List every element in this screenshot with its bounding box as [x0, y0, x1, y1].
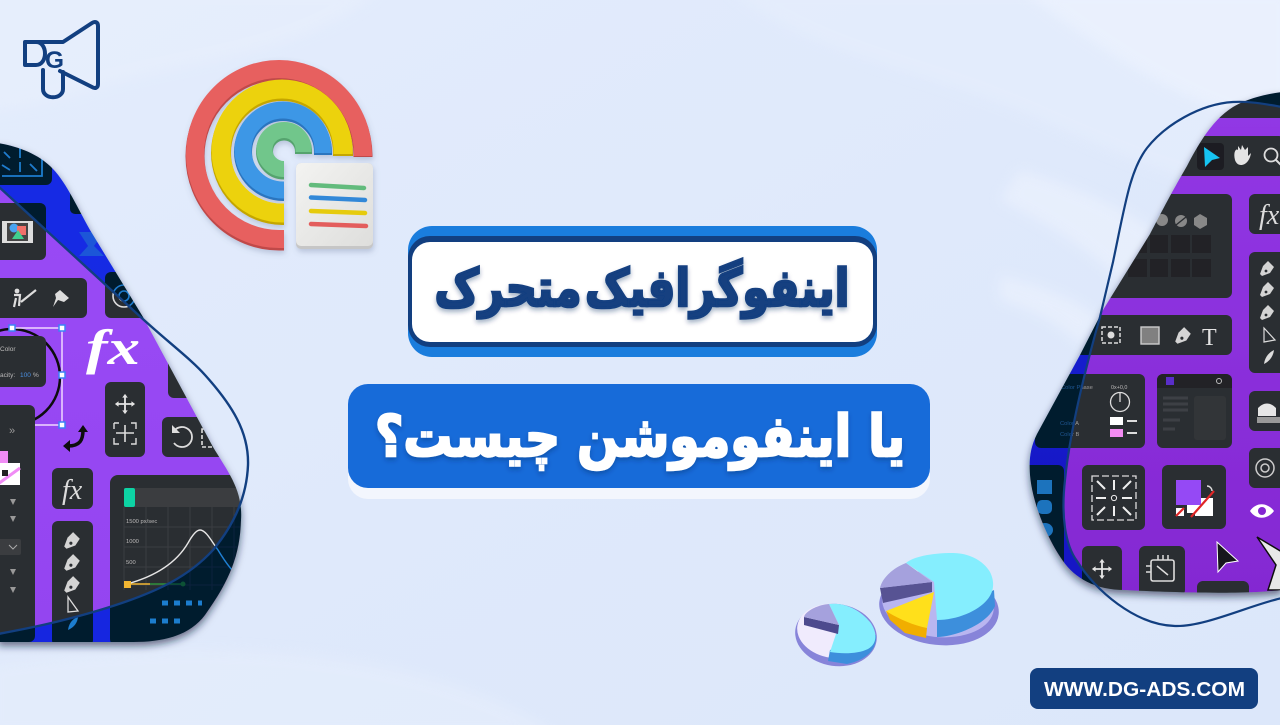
- panel: colour phase: Color B: [1060, 432, 1079, 438]
- icon: star: [1257, 537, 1280, 590]
- subtitle text: یا اینفوموشن چیست؟: [375, 404, 905, 470]
- blue tint outside outline: [1030, 92, 1280, 585]
- panel: speed graph: 1500 px/sec: [126, 519, 157, 525]
- panel: colour opacity: %: [33, 372, 39, 379]
- panel: colour phase: Color Phase: [1061, 385, 1093, 391]
- panel: fx button: [1249, 194, 1280, 234]
- yellow slice: [886, 592, 934, 638]
- icon: black cursor: [1217, 542, 1238, 572]
- panel: spiral tool: [1249, 448, 1280, 488]
- panel: pen tools: [52, 521, 93, 646]
- yellow arc: [221, 89, 343, 215]
- panel: properties: [0, 405, 35, 642]
- panel: colour opacity: [0, 336, 46, 387]
- green arc: [265, 130, 304, 171]
- panel: anchor arrows grid: [1082, 465, 1145, 530]
- icon: hourglass: [79, 232, 104, 256]
- panel: pen tools: [1249, 252, 1280, 373]
- panel: colour opacity: Color: [0, 346, 16, 353]
- icon: big fx: fx: [86, 319, 140, 375]
- right blob outline: [1064, 102, 1280, 626]
- panel: shape library: [1110, 194, 1232, 298]
- panel: browser window: [1157, 374, 1232, 448]
- blue arc: [243, 110, 323, 192]
- panel: move button: [1082, 546, 1122, 590]
- panel: reload tools: [162, 417, 220, 457]
- panel: colour phase: [1035, 374, 1145, 448]
- panel: pointer toolbar: [1170, 136, 1280, 176]
- title card: [408, 226, 877, 357]
- logo icon: DG megaphone: G: [45, 47, 64, 74]
- left blob outline: [0, 186, 248, 634]
- purple slice: [880, 563, 932, 603]
- panel: colour phase: 0x+0,0: [1111, 385, 1127, 391]
- panel: colour opacity: 100: [20, 372, 31, 379]
- panel: shape stack: [1030, 465, 1064, 562]
- panel: shape tools toolbar: T: [1202, 325, 1217, 351]
- panel: colour opacity: acity:: [0, 372, 15, 379]
- icon: eye: [1250, 504, 1274, 518]
- panel: shape tools toolbar: [1080, 315, 1232, 355]
- panel: fx button: fx: [1259, 200, 1280, 231]
- icon: rotate arrow: [68, 430, 83, 446]
- red arc: [195, 69, 363, 241]
- panel: speed graph: [110, 475, 250, 647]
- panel: colour phase: Color A: [1060, 421, 1079, 427]
- icon: large 3D pie chart: [875, 553, 1003, 651]
- website badge: [1030, 668, 1258, 709]
- panel: bridge tool: [1249, 391, 1280, 431]
- panel: speed graph: 500: [126, 560, 136, 566]
- panel: chip icon: [1139, 546, 1185, 596]
- cyan slice: [906, 553, 995, 637]
- panel: speed graph: 1000: [126, 539, 139, 545]
- purple slice: [804, 604, 839, 634]
- selection circle with handles: [0, 325, 65, 428]
- icon: concentric rainbow with document: [195, 69, 373, 249]
- panel: top arrows grid: [0, 143, 52, 185]
- panel: fx button: [52, 468, 93, 509]
- panel: tools toolbar: [0, 278, 87, 318]
- icon: small 3D pie chart: [791, 599, 881, 671]
- website badge: WWW.DG-ADS.COM: [1044, 679, 1245, 701]
- panel: properties: »: [9, 425, 15, 437]
- blue tint outside outline: [0, 144, 242, 642]
- panel: spiral: [105, 272, 144, 318]
- cyan slice: [828, 604, 876, 664]
- panel: left software collage: [0, 142, 247, 652]
- panel: right software collage: [1024, 91, 1280, 602]
- panel: film icon: [0, 203, 46, 260]
- logo icon: DG megaphone: [25, 22, 98, 97]
- document card: [296, 163, 373, 249]
- panel: move tools: [105, 382, 145, 457]
- panel: fill and stroke swatch: [1162, 465, 1226, 529]
- panel: fx button: fx: [62, 475, 83, 506]
- subtitle card: [348, 384, 930, 499]
- title text: اینفوگرافیک متحرک: [434, 258, 850, 319]
